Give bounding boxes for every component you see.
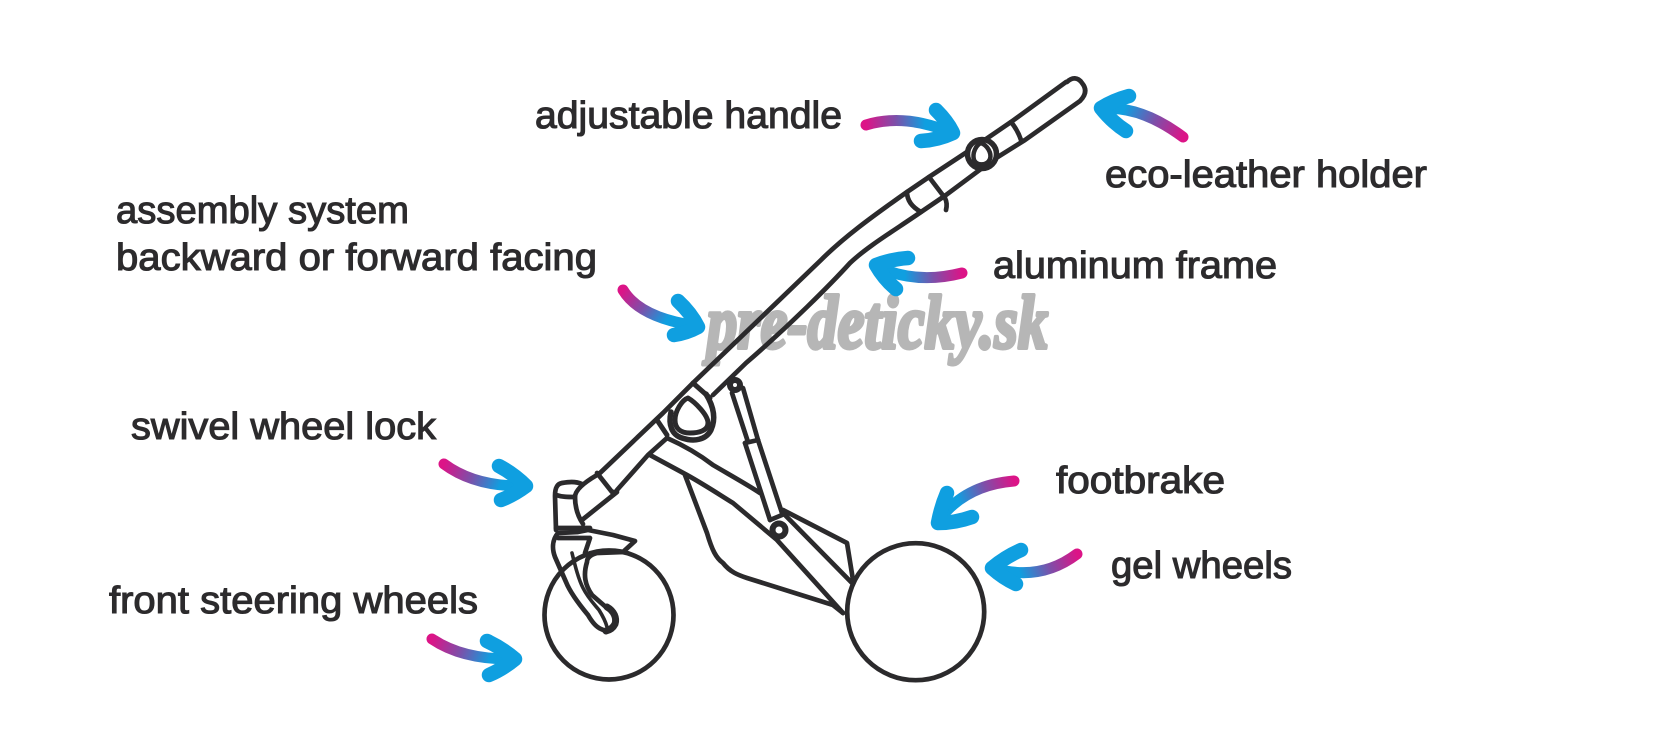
label: backward or forward facing: backward or forward facing bbox=[116, 237, 597, 279]
handle adjust ring bbox=[968, 140, 996, 168]
assembly joint bbox=[657, 383, 714, 440]
arrow: front steering wheels bbox=[432, 639, 515, 675]
basket bbox=[685, 475, 843, 613]
arrow: swivel wheel lock bbox=[444, 464, 526, 500]
front fork bbox=[553, 530, 635, 631]
label: adjustable handle: adjustable handle bbox=[535, 95, 842, 137]
handlebar and aluminum tube bbox=[600, 78, 1085, 473]
arrow: adjustable handle bbox=[866, 110, 953, 141]
label: aluminum frame: aluminum frame bbox=[993, 245, 1277, 287]
label: footbrake: footbrake bbox=[1056, 460, 1225, 502]
footbrake panel bbox=[783, 510, 853, 583]
label: front steering wheels: front steering wheels bbox=[109, 580, 478, 622]
rear wheel bbox=[847, 543, 984, 680]
front wheel bbox=[544, 550, 674, 680]
swivel lock bracket bbox=[555, 482, 590, 530]
arrow: footbrake bbox=[938, 481, 1014, 523]
label: eco-leather holder: eco-leather holder bbox=[1105, 154, 1427, 196]
arrow: aluminum frame bbox=[876, 258, 962, 289]
arrow: eco-leather holder bbox=[1101, 96, 1183, 137]
stroller line drawing bbox=[544, 78, 1085, 680]
seat rails bbox=[650, 438, 843, 613]
label: gel wheels: gel wheels bbox=[1111, 545, 1292, 587]
watermark: pre-deticky.sk: pre-deticky.sk bbox=[702, 281, 1048, 365]
label: swivel wheel lock: swivel wheel lock bbox=[131, 406, 437, 448]
telescopic strut bbox=[730, 380, 786, 536]
arrow: gel wheels bbox=[992, 550, 1077, 584]
lower tube and collar bbox=[575, 438, 667, 524]
label: assembly system: assembly system bbox=[116, 190, 409, 232]
arrow: assembly system bbox=[623, 290, 698, 335]
